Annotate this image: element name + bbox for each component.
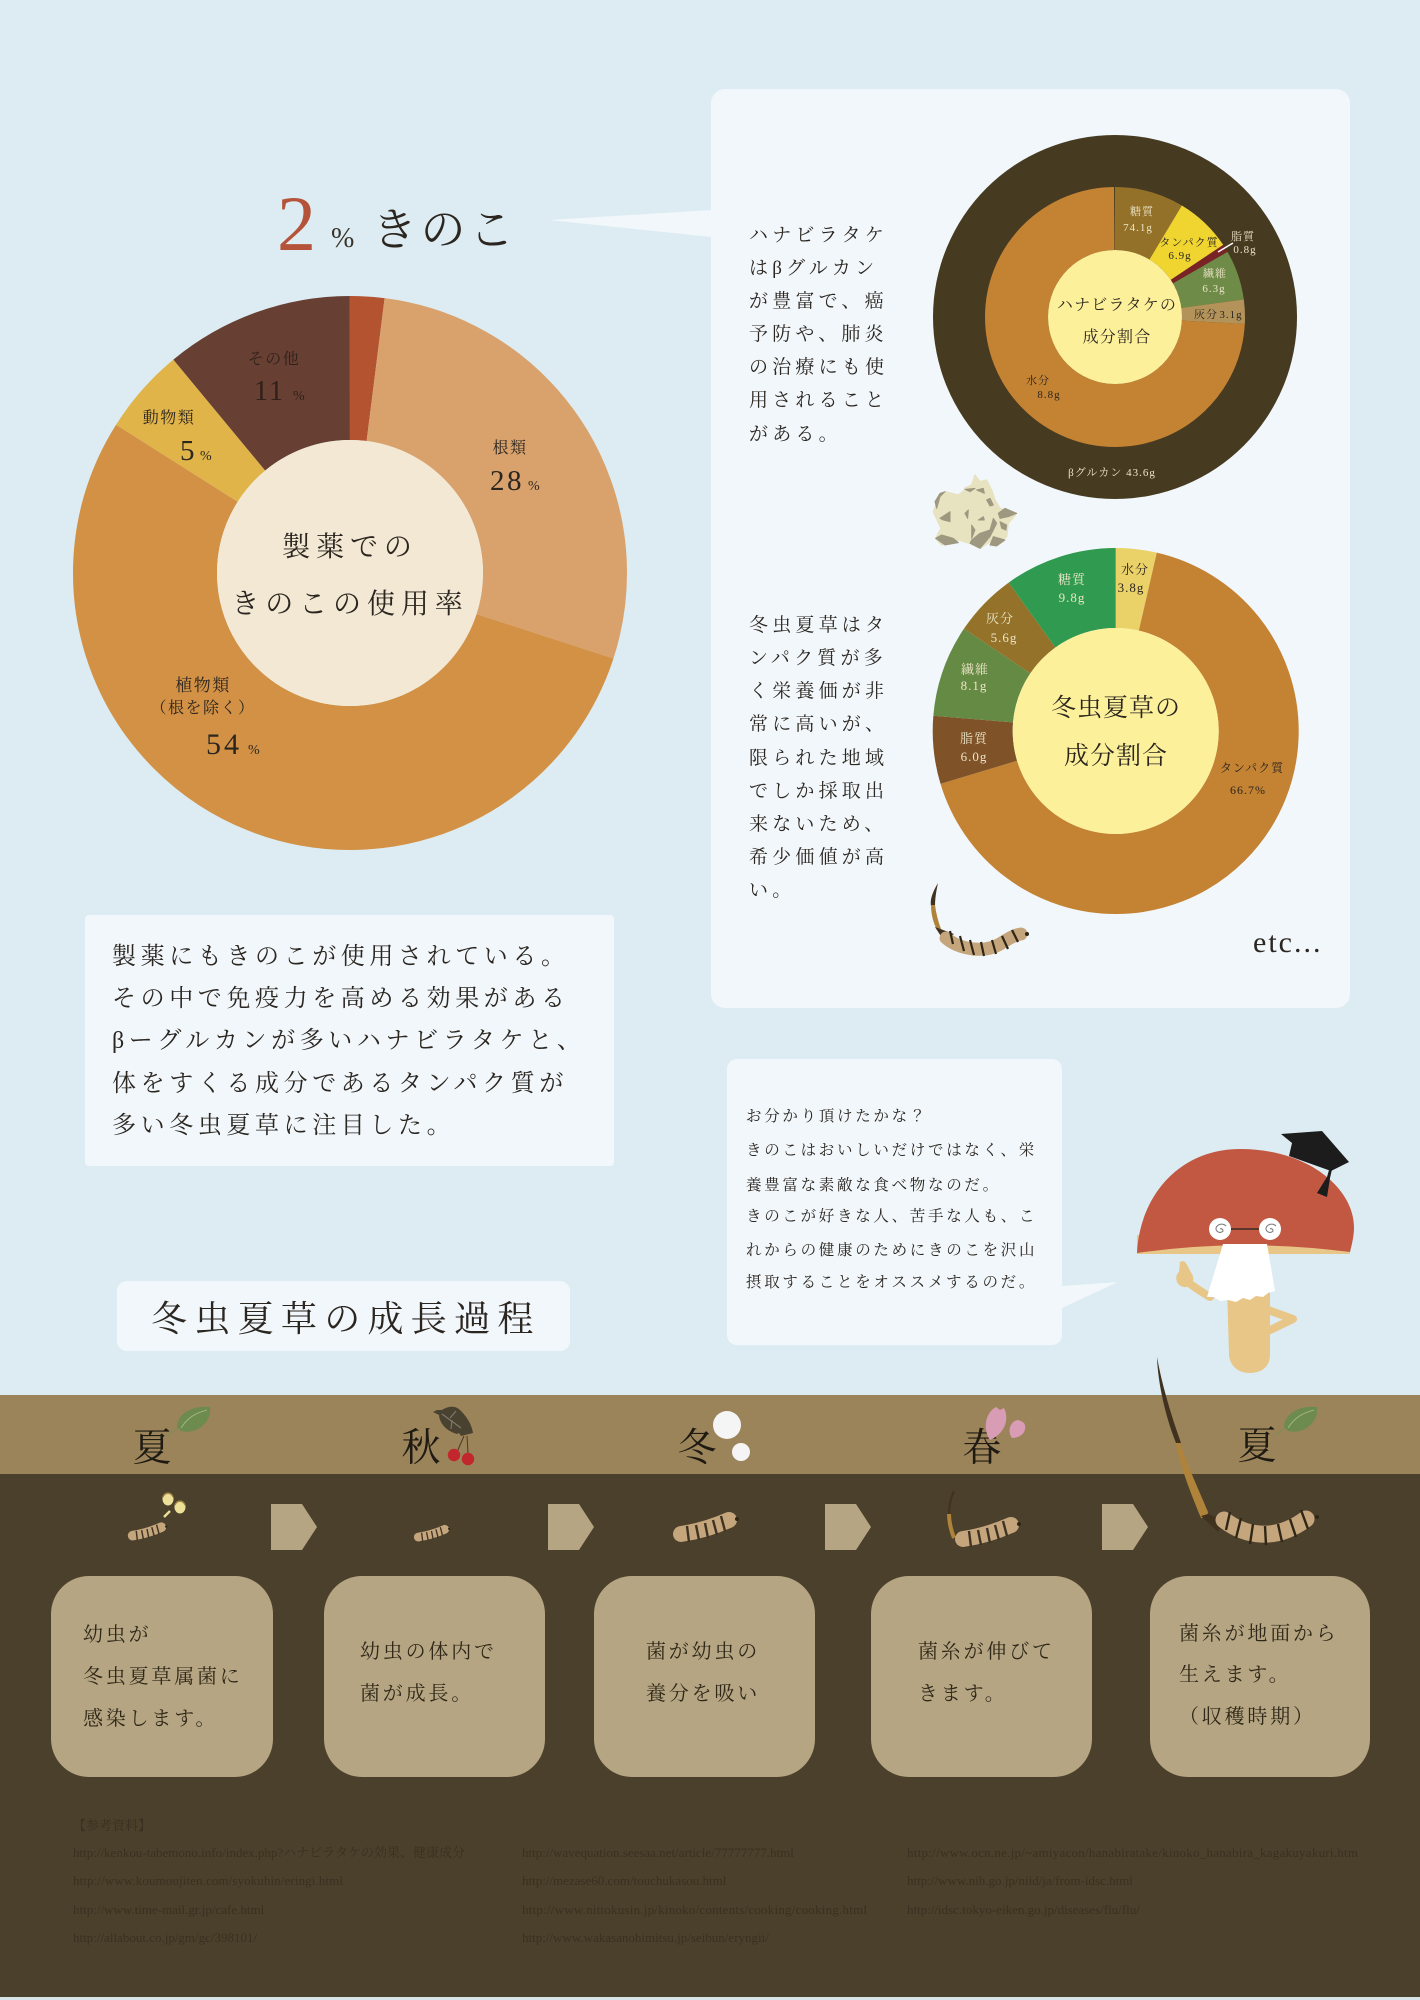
references: 【参考資料】 xyxy=(73,1818,151,1833)
fat callout line xyxy=(1218,243,1233,252)
references: http://idsc.tokyo-eiken.go.jp/diseases/flu/flu/ xyxy=(907,1902,1140,1917)
donut chart: use of mushrooms in pharmaceuticals xyxy=(143,350,555,778)
card: stage 4: 菌糸が伸びて xyxy=(918,1640,1055,1663)
references: http://www.wakasanohimitsu.jp/seibun/eryngii/ xyxy=(522,1930,769,1945)
title: 2% kinoko: きのこ xyxy=(372,205,518,255)
donut labels: 3.1g xyxy=(1219,309,1243,321)
label: others 11%: % xyxy=(293,389,305,404)
donut labels: 脂質 xyxy=(1231,229,1255,243)
panel: speech bubble xyxy=(727,1059,1118,1345)
donut labels: 66.7% xyxy=(1230,783,1266,797)
title: 2% kinoko: % xyxy=(331,223,354,254)
donut labels: 糖質 xyxy=(1130,204,1154,218)
text: hanabiratake description: が豊富で、癌 xyxy=(749,290,888,312)
icon: green leaf xyxy=(1273,1407,1317,1437)
gills xyxy=(1137,1235,1350,1254)
donut labels: 5.6g xyxy=(991,630,1017,645)
stage 1: infection xyxy=(133,1492,186,1540)
label: plants 54% xyxy=(150,676,260,761)
icon: cordyceps caterpillar xyxy=(931,883,1029,956)
donut labels: 繊維 xyxy=(1203,266,1227,280)
card: stage 1: 冬虫夏草属菌に xyxy=(83,1665,243,1688)
season: autumn xyxy=(401,1407,474,1470)
heading pill: cordyceps growth process xyxy=(117,1281,570,1351)
donut center title: きのこの使用率 xyxy=(231,588,469,620)
references: http://kenkou-tabemono.info/index.php?ハナビラタケの効果、健康成分 xyxy=(73,1845,465,1860)
donut labels: 8.1g xyxy=(961,678,987,693)
donut chart: hanabiratake composition xyxy=(933,135,1297,499)
text: cordyceps description: 常に高いが、 xyxy=(749,713,888,735)
card: stage 3: 養分を吸い xyxy=(646,1682,760,1705)
stage 4: worm with sprout xyxy=(949,1491,1021,1547)
speech text: 摂取することをオススメするのだ。 xyxy=(746,1273,1037,1291)
card: stage 2: 菌が成長。 xyxy=(360,1682,474,1705)
card: stage 5: 菌糸が地面から xyxy=(1179,1622,1339,1645)
thumbs-up hand xyxy=(1176,1261,1193,1287)
title: 2% kinoko xyxy=(277,180,518,267)
donut labels xyxy=(1026,204,1257,479)
card: stage 4: きます。 xyxy=(918,1683,1008,1705)
references: http://wavequation.seesaa.net/article/77777777.html xyxy=(522,1845,794,1860)
label: animals 5%: % xyxy=(200,449,212,464)
bottom edge xyxy=(0,1997,1420,2000)
beard xyxy=(1207,1244,1275,1302)
text: hanabiratake description: がある。 xyxy=(749,424,842,445)
donut labels: 脂質 xyxy=(960,731,988,746)
text: cordyceps description: 来ないため、 xyxy=(749,813,887,835)
graduation cap xyxy=(1281,1131,1349,1197)
speech text: 養豊富な素敵な食べ物なのだ。 xyxy=(746,1176,1001,1194)
references: http://allabout.co.jp/gm/gc/398101/ xyxy=(73,1930,258,1945)
speech text xyxy=(746,1107,1037,1291)
text: cordyceps description: 希少価値が高 xyxy=(749,846,888,868)
references: http://www.nittokusin.jp/kinoko/contents/cooking/cooking.html xyxy=(522,1902,867,1917)
season: winter: 冬 xyxy=(677,1427,717,1470)
references xyxy=(73,1818,1358,1945)
season: spring: 春 xyxy=(962,1427,1002,1470)
text: cordyceps description: 限られた地域 xyxy=(749,747,888,769)
label: roots 28%: % xyxy=(528,479,540,494)
text panel: intro: その中で免疫力を高める効果がある xyxy=(112,985,570,1012)
donut labels xyxy=(960,562,1284,797)
text: hanabiratake description: はβグルカン xyxy=(749,257,878,279)
card: stage 5: 生えます。 xyxy=(1179,1663,1291,1686)
character: professor mushroom xyxy=(1137,1131,1354,1373)
label: roots 28%: 根類 xyxy=(492,438,528,457)
donut labels: 糖質 xyxy=(1058,572,1086,587)
donut center title: 製薬での xyxy=(282,531,418,563)
references: http://www.ocn.ne.jp/~amiyacon/hanabiratake/kinoko_hanabira_kagakuyakuri.htm xyxy=(907,1845,1358,1860)
icon: cherry petals xyxy=(986,1407,1025,1440)
card: stage 1 xyxy=(51,1576,273,1777)
speech text: きのこが好きな人、苦手な人も、こ xyxy=(746,1207,1037,1225)
season: spring xyxy=(962,1407,1025,1470)
stem xyxy=(1227,1285,1270,1373)
text panel: intro: 体をすくる成分であるタンパク質が xyxy=(112,1070,568,1097)
arrows between stages xyxy=(271,1504,1148,1550)
label: plants 54%: 植物類 xyxy=(175,676,231,695)
label: plants 54%: % xyxy=(248,743,260,758)
label: animals 5%: 動物類 xyxy=(143,409,195,427)
donut labels: 6.3g xyxy=(1202,283,1226,295)
cap xyxy=(1137,1149,1354,1253)
speech text: お分かり頂けたかな？ xyxy=(746,1107,928,1125)
speech bubble tail xyxy=(1062,1282,1118,1308)
card: stage 5: （収穫時期） xyxy=(1179,1705,1316,1728)
text panel: intro: 製薬にもきのこが使用されている。 xyxy=(112,943,570,970)
glasses xyxy=(1209,1218,1281,1240)
donut labels: 繊維 xyxy=(961,662,989,677)
icon: brown leaf and cherries xyxy=(433,1407,474,1465)
donut labels: 水分 xyxy=(1121,562,1149,577)
panel: nutrition composition xyxy=(711,89,1350,1008)
icon: snowballs xyxy=(713,1411,750,1461)
arms xyxy=(1185,1280,1293,1330)
text: hanabiratake description: の治療にも使 xyxy=(749,356,888,378)
label: others 11% xyxy=(248,350,305,407)
donut labels: タンパク質 xyxy=(1159,236,1219,249)
card: stage 3: 菌が幼虫の xyxy=(646,1640,760,1663)
card: stage 2 xyxy=(324,1576,545,1777)
icon: green leaf xyxy=(166,1407,210,1437)
card: stage 5 xyxy=(1150,1576,1370,1777)
label: animals 5% xyxy=(143,409,212,467)
season: summer again xyxy=(1237,1407,1317,1468)
donut labels: 3.8g xyxy=(1118,580,1144,595)
card: stage 2: 幼虫の体内で xyxy=(360,1640,497,1663)
references: http://mezase60.com/touchukasou.html xyxy=(522,1873,727,1888)
label: animals 5%: 5 xyxy=(180,435,194,467)
text: hanabiratake description: 予防や、肺炎 xyxy=(749,323,888,345)
donut labels: タンパク質 xyxy=(1220,761,1284,775)
text: cordyceps description: く栄養価が非 xyxy=(749,680,888,702)
text: cordyceps description: い。 xyxy=(749,880,795,901)
text: hanabiratake description: ハナビラタケ xyxy=(749,225,888,246)
text panel: intro: 多い冬虫夏草に注目した。 xyxy=(112,1112,455,1139)
label: others 11%: その他 xyxy=(248,350,300,368)
stage 5: worm with tall stroma xyxy=(1157,1357,1319,1545)
label: others 11%: 11 xyxy=(254,376,285,407)
card: stage 1: 感染します。 xyxy=(83,1706,218,1730)
season: summer: 夏 xyxy=(132,1427,172,1470)
text: hanabiratake description xyxy=(749,225,888,445)
card: stage 4 xyxy=(871,1576,1092,1777)
label: plants 54%: 54 xyxy=(206,728,242,761)
donut labels: 0.8g xyxy=(1233,244,1257,256)
spores xyxy=(162,1492,186,1517)
donut labels: 8.8g xyxy=(1037,389,1061,401)
donut labels: 水分 xyxy=(1026,373,1050,387)
donut labels: 6.9g xyxy=(1168,250,1192,262)
text panel: intro xyxy=(85,915,614,1166)
ground: deep soil xyxy=(0,1474,1420,1997)
label: plants 54%: （根を除く） xyxy=(150,698,256,717)
text: cordyceps description: ンパク質が多 xyxy=(749,647,887,669)
donut labels: βグルカン 43.6g xyxy=(1068,466,1156,479)
donut labels: 灰分 xyxy=(986,611,1014,626)
text: etc: etc... xyxy=(1253,926,1322,959)
donut center title: 冬虫夏草の xyxy=(1051,694,1181,722)
label: roots 28%: 28 xyxy=(490,465,524,497)
donut center title xyxy=(1051,694,1181,770)
text: cordyceps description: 冬虫夏草はタ xyxy=(749,614,888,636)
season: summer xyxy=(132,1407,210,1470)
card: stage 3 xyxy=(594,1576,815,1777)
donut center title: 成分割合 xyxy=(1083,328,1151,346)
season: summer again: 夏 xyxy=(1237,1425,1277,1468)
icon: hanabiratake mushroom xyxy=(933,475,1017,548)
season: autumn: 秋 xyxy=(401,1427,441,1470)
title: 2% kinoko: 2 xyxy=(277,180,316,267)
speech tail from title to right panel xyxy=(549,210,711,237)
ground: topsoil band xyxy=(0,1395,1420,1474)
label: roots 28% xyxy=(490,438,540,497)
text: cordyceps description: でしか採取出 xyxy=(749,780,888,802)
references: http://www.nih.go.jp/niid/ja/from-idsc.html xyxy=(907,1873,1133,1888)
references: http://www.koumoujiten.com/syokuhin/eringi.html xyxy=(73,1873,343,1888)
season: winter xyxy=(677,1411,750,1470)
donut center title: 成分割合 xyxy=(1064,742,1168,770)
donut center title: ハナビラタケの xyxy=(1057,296,1177,314)
speech text: れからの健康のためにきのこを沢山 xyxy=(746,1240,1037,1259)
text: cordyceps description xyxy=(749,614,888,901)
donut labels: 9.8g xyxy=(1059,590,1085,605)
stage 3: worm xyxy=(681,1516,739,1542)
text: hanabiratake description: 用されること xyxy=(749,390,888,411)
donut center title xyxy=(1057,296,1177,346)
card: stage 1: 幼虫が xyxy=(83,1623,151,1646)
donut chart: cordyceps composition xyxy=(960,562,1284,874)
donut labels: 灰分 xyxy=(1194,307,1218,321)
text panel: intro: βーグルカンが多いハナビラタケと、 xyxy=(112,1027,585,1054)
donut labels: 6.0g xyxy=(961,749,987,764)
heading pill: cordyceps growth process: 冬虫夏草の成長過程 xyxy=(151,1299,541,1339)
donut labels: 74.1g xyxy=(1123,222,1153,234)
stage 2: worm xyxy=(418,1527,450,1541)
donut center title xyxy=(231,531,469,620)
references: http://www.time-mail.gr.jp/cafe.html xyxy=(73,1902,265,1917)
speech text: きのこはおいしいだけではなく、栄 xyxy=(746,1141,1037,1159)
